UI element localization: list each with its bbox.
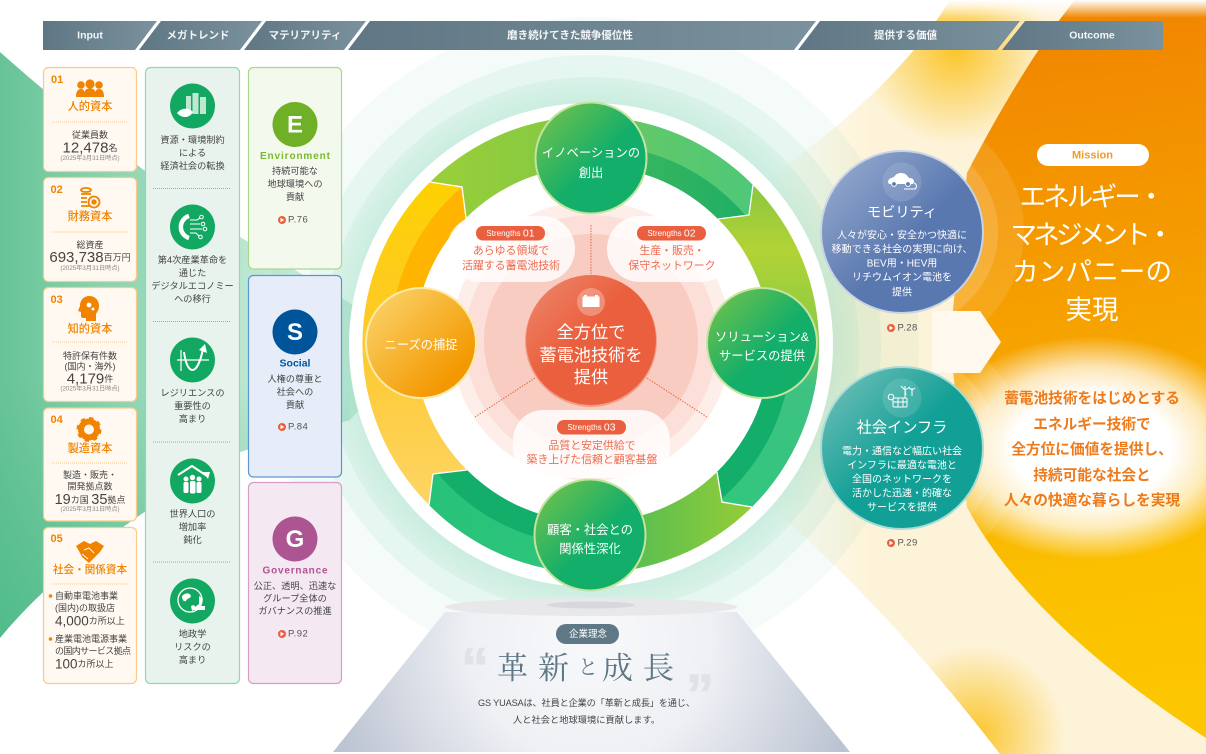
trend text: resilience <box>160 388 225 424</box>
panel: financial capital: 693,738百万円 <box>49 249 131 266</box>
trend text: fourth industrial revolution: デジタルエコノミー <box>151 280 234 291</box>
panel: human capital: 12,478名 <box>63 140 117 156</box>
page reference: P.76 <box>278 214 308 226</box>
trend text: geopolitical risk <box>174 628 211 665</box>
panel: intellectual capital: (2025年3月31日時点) <box>60 384 120 392</box>
strengths 02 pill: Strengths 02 <box>647 227 696 239</box>
panel: intellectual capital: 4,179件 <box>67 370 113 388</box>
trend text: resilience: 高まり <box>179 413 206 424</box>
header: input <box>43 21 157 50</box>
panel: intellectual capital: (国内・海外) <box>64 360 116 372</box>
outcome description <box>1004 390 1180 509</box>
icon: globe and microscope <box>170 578 215 624</box>
header: competitive advantage <box>348 21 816 50</box>
ring segment: top <box>430 116 753 225</box>
value circle: social infrastructure: 全国のネットワークを <box>852 472 952 486</box>
panel: social: 貢献 <box>286 399 304 410</box>
panel: governance: Governance <box>262 566 328 576</box>
mission pill <box>1037 144 1149 166</box>
badge: S: S <box>287 319 303 346</box>
panel: manufacturing capital: (2025年3月31日時点) <box>60 505 120 513</box>
panel: manufacturing capital: 製造資本 <box>68 441 112 455</box>
mission statement <box>1010 182 1174 325</box>
icon: gear <box>78 418 100 440</box>
trend text: population growth: 鈍化 <box>183 534 202 545</box>
panel: environment <box>248 68 342 269</box>
panel: intellectual capital: 知的資本 <box>68 322 112 336</box>
panel: social <box>248 276 342 477</box>
trend text: resource constraints <box>160 134 225 171</box>
trend text: fourth industrial revolution: への移行 <box>174 293 211 304</box>
background: concentric green halo <box>263 17 919 673</box>
node: customer relations: 関係性深化 <box>559 542 621 556</box>
badge: E: E <box>287 112 303 138</box>
panel: environment: Environment <box>260 151 331 162</box>
panel: financial capital: 総資産 <box>76 239 104 250</box>
opening quote: “ <box>461 636 489 698</box>
trend text: resource constraints: 資源・環境制約 <box>160 134 225 145</box>
panel: social and relationship capital: の国内サービス拠点 <box>55 645 131 656</box>
ring segment: left <box>362 182 470 505</box>
closing quote: ” <box>686 662 714 726</box>
page reference: P.28: P.28 <box>898 322 918 334</box>
panel: governance: グループ全体の <box>263 592 327 604</box>
header: megatrends: メガトレンド <box>166 28 230 42</box>
strengths 01 text: 活躍する蓄電池技術 <box>462 258 560 272</box>
panel: governance <box>248 482 342 684</box>
outcome description: 全方位に価値を提供し、 <box>1011 440 1173 458</box>
header: input: Input <box>77 30 103 42</box>
philosophy pill <box>556 624 619 644</box>
strengths 01 text: あらゆる領域で <box>473 243 549 257</box>
panel: financial capital: 財務資本 <box>68 209 112 223</box>
panel: human capital: 従業員数 <box>72 129 108 140</box>
trend text: fourth industrial revolution: 第4次産業革命を <box>158 254 227 265</box>
strengths 02 bubble <box>607 216 734 282</box>
icon: city and leaf <box>170 84 215 128</box>
value circle: social infrastructure: 社会インフラ <box>857 420 947 436</box>
strengths 01 text <box>462 243 560 272</box>
mission statement: エネルギー・ <box>1020 182 1164 212</box>
page reference: P.92 <box>278 628 308 640</box>
arrow: pale pentagon pointing to mission <box>932 311 1001 373</box>
panel: intellectual capital: 特許保有件数 <box>63 350 117 361</box>
badge: G: G <box>286 526 304 553</box>
value circle: social infrastructure: 活かした迅速・的確な <box>852 486 952 500</box>
node: customer relations <box>534 480 646 590</box>
trend text: population growth <box>170 508 215 545</box>
strengths 02 text <box>628 243 716 272</box>
icon: electric car <box>882 162 922 202</box>
node: innovation: イノベーションの <box>542 146 640 160</box>
center circle text: 全方位で <box>557 322 625 342</box>
trend text: resilience: 重要性の <box>174 400 211 411</box>
mission statement: 実現 <box>1066 295 1118 325</box>
center circle text <box>539 322 643 387</box>
icon: wind turbine and solar <box>882 378 922 418</box>
panel: manufacturing capital: 19カ国 35拠点 <box>55 492 125 508</box>
philosophy title: 長 <box>643 650 674 686</box>
page reference: P.84 <box>278 422 308 432</box>
trend text: population growth: 世界人口の <box>170 508 215 519</box>
mission statement: マネジメント・ <box>1010 220 1174 250</box>
background: cream band behind outcome <box>765 0 1206 754</box>
header bar <box>43 21 1163 50</box>
trend text: resource constraints: 経済社会の転換 <box>160 160 225 171</box>
strengths 03 pill: Strengths 03 <box>567 421 616 433</box>
philosophy title: 革 <box>497 650 528 686</box>
center circle text: 提供 <box>574 367 608 387</box>
value circle: mobility: 移動できる社会の実現に向け、 <box>832 242 972 256</box>
background: green input wedge <box>0 52 420 638</box>
panel: intellectual capital <box>44 288 136 402</box>
panel: social and relationship capital: 4,000カ所以上 <box>55 614 125 628</box>
outcome description: 持続可能な社会と <box>1033 466 1151 484</box>
panel: human capital: (2025年3月31日時点) <box>60 154 120 162</box>
badge: E <box>272 102 318 147</box>
value circle: mobility: リチウムイオン電池を <box>852 270 952 284</box>
icon: population <box>170 458 215 504</box>
dotted connector lines <box>475 225 707 417</box>
node: customer needs <box>366 288 476 398</box>
badge: G <box>272 516 318 562</box>
strengths 03 text: 築き上げた信頼と顧客基盤 <box>527 452 657 466</box>
value circle: social infrastructure <box>821 367 983 529</box>
center circle: all-round battery technology <box>525 275 657 407</box>
badge: S <box>272 310 318 354</box>
strengths 03 pill <box>557 420 626 434</box>
panel: environment: 貢献 <box>286 191 304 202</box>
strengths 01 pill: Strengths 01 <box>486 227 535 239</box>
icon: resilience curve <box>170 338 215 382</box>
panel: human capital <box>44 68 136 172</box>
strengths 02 text: 保守ネットワーク <box>628 258 716 272</box>
philosophy title: 新 <box>538 650 569 686</box>
philosophy statement <box>478 697 695 725</box>
node: customer relations: 顧客・社会との <box>547 522 633 537</box>
panel: social: 人権の尊重と <box>267 373 323 384</box>
header: materiality: マテリアリティ <box>269 30 341 42</box>
value circle: social infrastructure: インフラに最適な電池と <box>847 458 957 472</box>
background: orange outcome field <box>939 0 1206 738</box>
panel: intellectual capital: 03 <box>50 294 63 306</box>
panel: human capital: 人的資本 <box>68 99 112 113</box>
header: value provided: 提供する価値 <box>874 28 937 42</box>
node: innovation: 創出 <box>579 166 603 180</box>
outcome description: 蓄電池技術をはじめとする <box>1004 390 1180 407</box>
philosophy statement: GS YUASAは、社員と企業の「革新と成長」を通じ、 <box>478 697 695 708</box>
header: materiality <box>244 21 366 50</box>
header: competitive advantage: 磨き続けてきた競争優位性 <box>507 28 633 42</box>
panel: manufacturing capital: 開発拠点数 <box>67 480 113 492</box>
trend text: fourth industrial revolution <box>151 254 234 304</box>
philosophy statement: 人と社会と地球環境に貢献します。 <box>513 714 660 725</box>
panel: social and relationship capital: 産業電池電源事業 <box>55 633 127 644</box>
value circle: mobility: モビリティ <box>867 205 937 221</box>
mission statement: カンパニーの <box>1012 257 1172 287</box>
panel: governance: ガバナンスの推進 <box>258 605 332 616</box>
philosophy title: 成 <box>602 650 633 686</box>
node: customer needs: ニーズの捕捉 <box>384 337 458 352</box>
icon: gear and circuits <box>170 204 215 250</box>
value circle: mobility: 人々が安心・安全かつ快適に <box>837 228 967 242</box>
ring segment: right <box>717 185 820 507</box>
node: solutions: サービスの提供 <box>719 348 805 363</box>
icon: head with gears <box>78 296 99 321</box>
ring: four value-creation arrows <box>362 116 819 573</box>
page reference: P.76: P.76 <box>288 214 308 226</box>
panel: megatrends <box>146 68 240 684</box>
panel: social and relationship capital: (国内)の取扱店 <box>55 602 115 613</box>
outcome description: 人々の快適な暮らしを実現 <box>1004 491 1180 509</box>
panel: social: 社会への <box>277 386 313 397</box>
panel: financial capital <box>44 178 136 282</box>
pedestal: corporate philosophy <box>333 598 850 752</box>
panel: social and relationship capital: 100カ所以上 <box>55 656 114 672</box>
page reference: P.84: P.84 <box>288 422 308 432</box>
philosophy title: と <box>578 657 598 679</box>
icon: coins <box>81 188 100 208</box>
ring segment: bottom <box>429 470 752 569</box>
panel: social and relationship capital <box>44 528 136 684</box>
panel: environment: 地球環境への <box>267 178 323 189</box>
header: outcome <box>1002 21 1163 50</box>
outcome description: エネルギー技術で <box>1033 416 1151 433</box>
value circle: social infrastructure: 電力・通信など幅広い社会 <box>842 444 962 458</box>
icon: handshake <box>76 541 104 563</box>
header: megatrends <box>139 21 262 50</box>
strengths 01 bubble <box>447 216 575 282</box>
trend text: population growth: 増加率 <box>179 521 206 532</box>
trend text: fourth industrial revolution: 通じた <box>179 268 206 278</box>
panel: governance: 公正、透明、迅速な <box>254 581 336 591</box>
value circle: mobility: BEV用・HEV用 <box>867 258 937 270</box>
icon: people <box>76 79 104 97</box>
strengths 02 text: 生産・販売・ <box>639 243 705 257</box>
panel: social and relationship capital: 自動車電池事業 <box>55 590 118 601</box>
strengths 03 text <box>527 438 657 466</box>
page reference: P.29 <box>887 538 918 548</box>
center: pink concentric rings <box>451 201 731 481</box>
panel: human capital: 01 <box>51 74 63 86</box>
page reference: P.29: P.29 <box>898 538 918 548</box>
philosophy pill: 企業理念 <box>569 628 607 640</box>
panel: manufacturing capital: 製造・販売・ <box>63 469 117 480</box>
trend text: geopolitical risk: 高まり <box>179 654 206 665</box>
strengths 03 bubble <box>513 410 670 478</box>
value circle: mobility: 提供 <box>892 286 912 298</box>
value circle: social infrastructure: サービスを提供 <box>867 500 937 514</box>
header: value provided <box>798 21 1020 50</box>
panel: social: Social <box>280 358 311 370</box>
node: solutions <box>707 288 817 398</box>
page reference: P.92: P.92 <box>288 628 308 640</box>
center circle text: 蓄電池技術を <box>539 345 643 365</box>
panel: social and relationship capital: 05 <box>50 533 63 545</box>
panel: social and relationship capital: 社会・関係資本 <box>53 563 127 576</box>
header: outcome: Outcome <box>1069 30 1115 42</box>
page reference: P.28 <box>887 322 918 334</box>
value circle: mobility <box>821 151 983 313</box>
panel: environment: 持続可能な <box>272 165 318 176</box>
trend text: resource constraints: による <box>179 148 206 158</box>
icon: battery <box>577 288 605 316</box>
trend text: geopolitical risk: 地政学 <box>179 628 206 639</box>
panel: financial capital: (2025年3月31日時点) <box>60 264 120 272</box>
node: solutions: ソリューション& <box>715 330 810 344</box>
node: innovation <box>536 102 646 214</box>
strengths 03 text: 品質と安定供給で <box>548 438 636 452</box>
panel: financial capital: 02 <box>50 184 63 196</box>
panel: manufacturing capital <box>44 408 136 521</box>
trend text: geopolitical risk: リスクの <box>174 642 211 652</box>
panel: manufacturing capital: 04 <box>50 414 64 426</box>
mission pill: Mission <box>1072 150 1113 162</box>
trend text: resilience: レジリエンスの <box>160 388 225 398</box>
